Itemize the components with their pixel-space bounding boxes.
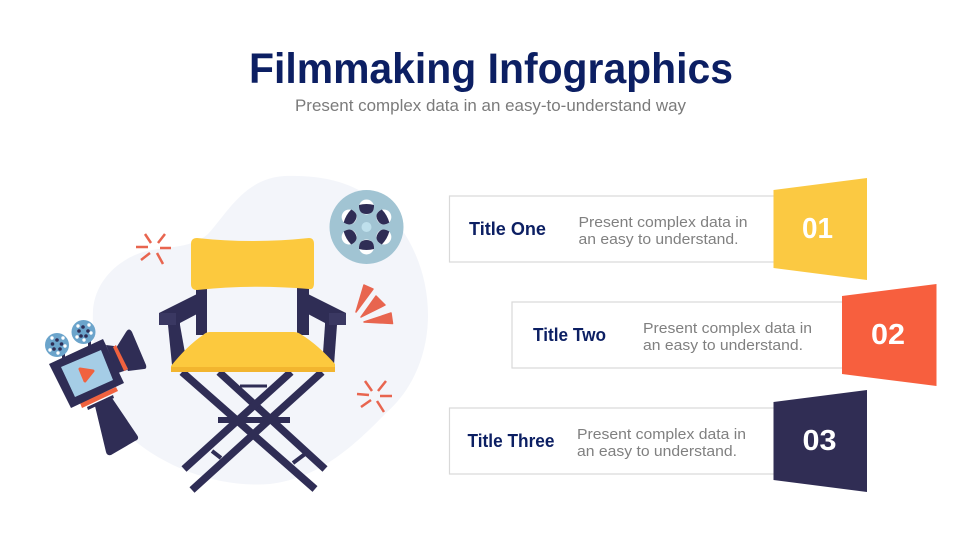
card 2 title: Title Two (533, 324, 606, 345)
illustration: director's chair scene (45, 176, 428, 490)
panel: item 3 (450, 390, 867, 492)
number tab 1 (774, 178, 867, 280)
icon: red burst wedges (356, 285, 392, 324)
panel: item 1 (450, 178, 867, 280)
lens (116, 330, 146, 371)
number tab 3 (774, 390, 867, 492)
title: Filmmaking Infographics (249, 45, 733, 93)
card 2 text: an easy to understand. (643, 337, 803, 354)
lens neck (106, 345, 127, 373)
card 3 text: Present complex data in (577, 426, 746, 443)
reels (45, 320, 96, 360)
card 1 (450, 196, 774, 262)
subtitle: Present complex data in an easy-to-understand way (295, 96, 686, 115)
icon: sparkle bottom right (357, 381, 392, 412)
camera base strip (80, 387, 118, 408)
card 1 text: an easy to understand. (578, 231, 738, 248)
number 03: 03 (802, 425, 836, 457)
card 1 title: Title One (469, 218, 546, 239)
chair legs (182, 372, 325, 490)
camera body (49, 339, 124, 408)
card 1 text: Present complex data in (578, 214, 748, 231)
number 02: 02 (871, 319, 905, 351)
camera screen (61, 350, 113, 397)
panel: item 2 (512, 284, 936, 386)
card 3 title: Title Three (468, 430, 554, 451)
icon: film reel (330, 190, 404, 264)
camera (45, 320, 146, 455)
number tab 2 (842, 284, 936, 386)
number 01: 01 (802, 213, 833, 245)
chair back (191, 238, 314, 290)
background blob (93, 176, 428, 485)
chair arms (159, 285, 346, 365)
play icon (80, 369, 93, 381)
icon: sparkle top left (136, 234, 171, 264)
card 2 (512, 302, 843, 368)
chair seat (171, 332, 335, 372)
card 3 (450, 408, 774, 474)
card 2 text: Present complex data in (643, 320, 812, 337)
chair (159, 238, 346, 490)
tripod (95, 398, 138, 455)
card 3 text: an easy to understand. (577, 443, 737, 460)
